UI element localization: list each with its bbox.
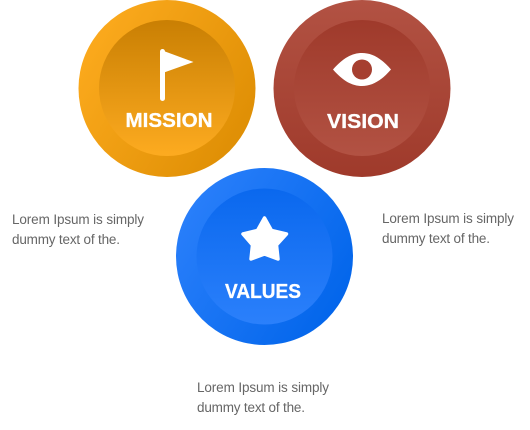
- text block: mission description: Lorem Ipsum is simply: [12, 212, 144, 227]
- text block: mission description: dummy text of the.: [12, 232, 120, 247]
- icon: flag: [160, 49, 194, 101]
- icon: eye: [333, 53, 391, 86]
- mission heading: MISSION: [126, 110, 212, 132]
- values outer circle: [176, 168, 353, 345]
- text block: vision description: dummy text of the.: [382, 231, 490, 246]
- icon: star: [243, 218, 286, 259]
- vision outer circle: [274, 0, 450, 177]
- vision heading: VISION: [327, 111, 399, 133]
- panel: vision: [274, 0, 450, 177]
- mission outer circle: [78, 0, 256, 177]
- values inner circle: [196, 188, 332, 324]
- panel: values: [176, 168, 353, 345]
- text block: values description: dummy text of the.: [197, 400, 305, 415]
- vision inner circle: [294, 20, 430, 156]
- text block: values description: Lorem Ipsum is simply: [197, 380, 329, 395]
- text block: vision description: Lorem Ipsum is simply: [382, 211, 514, 226]
- panel: mission: [78, 0, 256, 177]
- mission inner circle: [99, 20, 235, 156]
- values heading: VALUES: [225, 281, 301, 303]
